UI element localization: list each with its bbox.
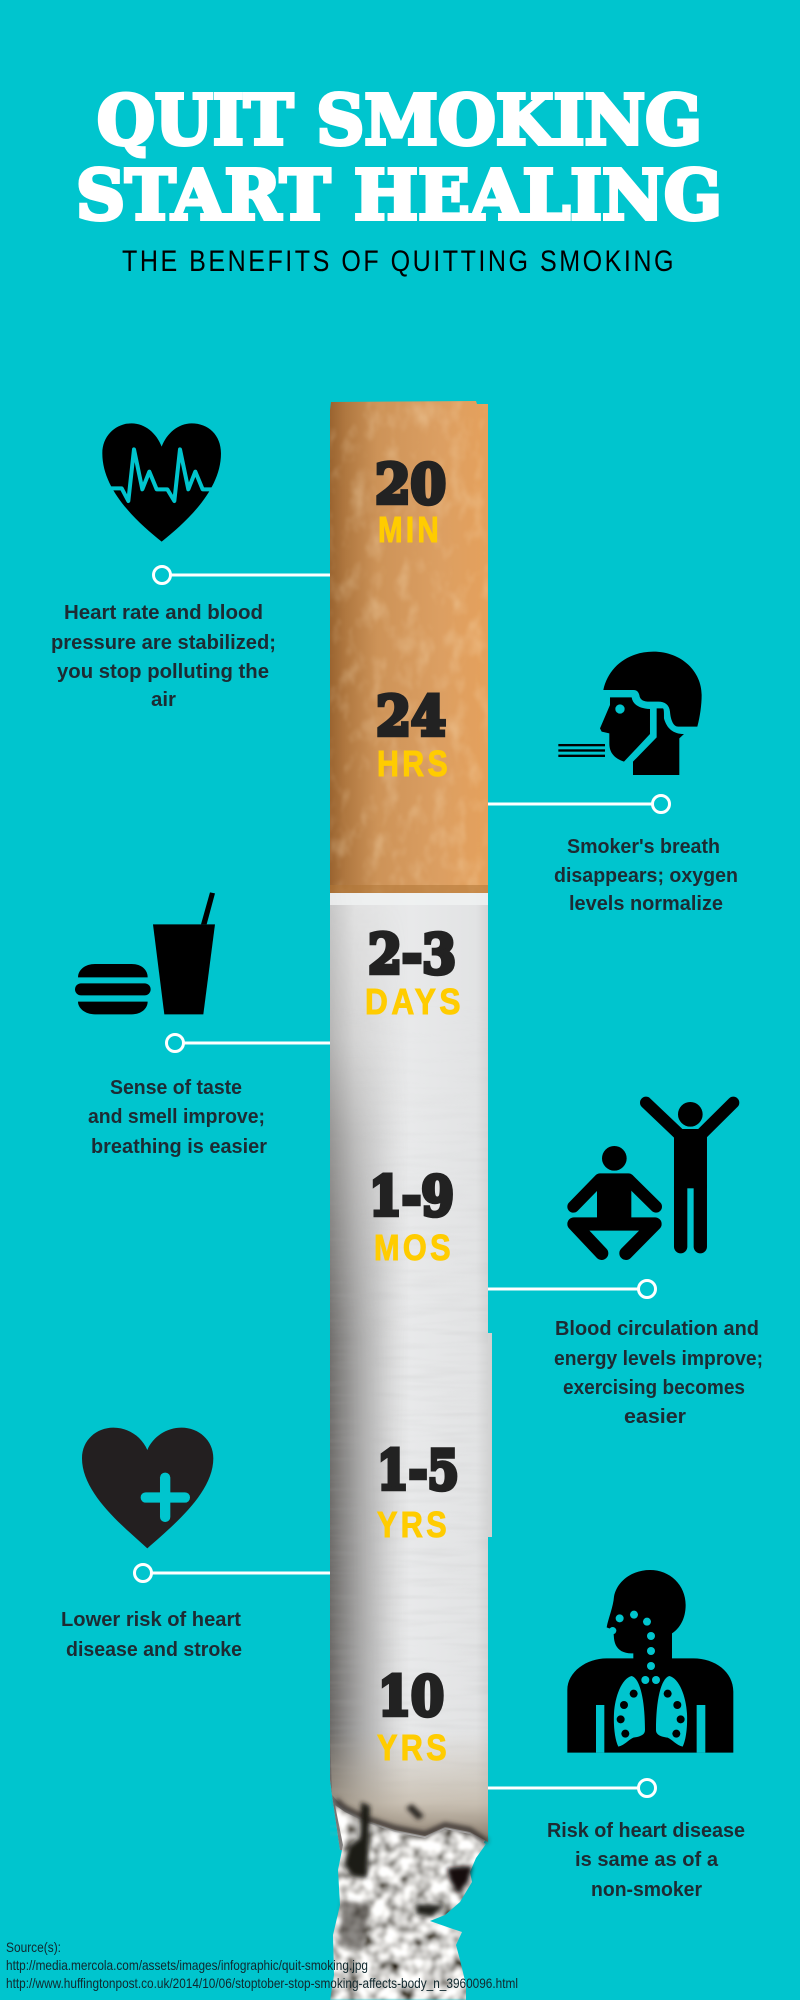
- label: 2-3 days: 2-3: [368, 922, 456, 986]
- icon: heart with pulse: [102, 423, 221, 542]
- connector: heart disease: [134, 1564, 330, 1582]
- cigarette filter: [330, 401, 488, 893]
- connector: taste: [166, 1034, 330, 1052]
- text: non-smoker risk: [547, 1820, 745, 1901]
- title: START HEALING: [76, 156, 722, 236]
- icon: exercising people: [573, 1102, 733, 1253]
- label: 20 min: [375, 452, 446, 550]
- connector: breath: [488, 796, 670, 812]
- icon: lungs and airway: [567, 1570, 733, 1753]
- text: heart rate: Heart rate and blood: [64, 602, 263, 624]
- text: taste: breathing is easier: [91, 1136, 267, 1158]
- text: circulation: easier: [624, 1406, 686, 1428]
- label: 1-5 yrs: [377, 1438, 459, 1545]
- label: 10 yrs: [377, 1664, 450, 1768]
- label: 2-3 days: DAYS: [365, 981, 464, 1022]
- label: 24 hrs: 24: [376, 684, 446, 748]
- sources: http://media.mercola.com/assets/images/infographic/quit-smoking.jpg: [6, 1957, 368, 1973]
- char marks: [336, 1800, 487, 1950]
- icon: burger and drink: [75, 892, 215, 1014]
- label: 24 hrs: HRS: [377, 743, 451, 784]
- text: circulation: energy levels improve;: [554, 1348, 763, 1370]
- text: circulation: Blood circulation and: [555, 1318, 759, 1340]
- cigarette: [330, 401, 492, 2000]
- text: breath: Smoker's breath: [567, 836, 720, 858]
- label: 20 min: MIN: [378, 509, 442, 550]
- icon: heart with plus: [82, 1428, 213, 1548]
- connector: non-smoker risk: [488, 1780, 656, 1796]
- text: heart disease: [61, 1609, 242, 1661]
- text: taste: [88, 1077, 267, 1158]
- label: 1-5 yrs: YRS: [377, 1504, 450, 1545]
- label: 1-9 mos: MOS: [374, 1227, 454, 1268]
- title: [76, 81, 722, 236]
- text: non-smoker risk: Risk of heart disease: [547, 1820, 745, 1842]
- label: 24 hrs: [376, 684, 451, 784]
- connector: circulation: [488, 1280, 656, 1298]
- label: 1-9 mos: [369, 1164, 454, 1268]
- text: non-smoker risk: is same as of a: [575, 1849, 719, 1871]
- paper texture: [330, 1788, 338, 1836]
- text: non-smoker risk: non-smoker: [591, 1879, 702, 1901]
- text: circulation: exercising becomes: [563, 1377, 745, 1399]
- label: 10 yrs: 10: [378, 1664, 444, 1728]
- label: 1-9 mos: 1-9: [369, 1164, 454, 1228]
- text: taste: Sense of taste: [110, 1077, 242, 1099]
- text: heart rate: you stop polluting the: [57, 661, 269, 683]
- text: heart rate: [51, 602, 276, 711]
- text: breath: disappears; oxygen: [554, 865, 738, 887]
- paper left shading: [330, 948, 398, 1850]
- text: breath: levels normalize: [569, 893, 723, 915]
- sources: http://www.huffingtonpost.co.uk/2014/10/06/stoptober-stop-smoking-affects-body_n_3960096.html: [6, 1975, 518, 1991]
- ash: [330, 1805, 486, 2000]
- title: QUIT SMOKING: [97, 81, 702, 161]
- sources: Source(s):: [6, 1939, 61, 1955]
- text: circulation: [554, 1318, 763, 1428]
- text: heart disease: disease and stroke: [66, 1639, 242, 1661]
- text: heart rate: air: [151, 689, 176, 711]
- subtitle: THE BENEFITS OF QUITTING SMOKING: [122, 245, 676, 278]
- text: heart disease: Lower risk of heart: [61, 1609, 241, 1631]
- text: breath: [554, 836, 738, 915]
- label: 1-5 yrs: 1-5: [377, 1438, 459, 1502]
- scorch band: [330, 1730, 488, 1842]
- icon: head breathing: [558, 652, 702, 775]
- text: taste: and smell improve;: [88, 1106, 265, 1128]
- cigarette paper: [330, 893, 492, 1860]
- text: heart rate: pressure are stabilized;: [51, 632, 276, 654]
- label: 10 yrs: YRS: [377, 1727, 450, 1768]
- connector: heart rate: [154, 566, 330, 584]
- label: 20 min: 20: [375, 452, 446, 516]
- paper highlight band: [330, 893, 488, 905]
- label: 2-3 days: [365, 922, 464, 1022]
- sources: [6, 1939, 518, 1991]
- filter lower shading: [330, 885, 488, 893]
